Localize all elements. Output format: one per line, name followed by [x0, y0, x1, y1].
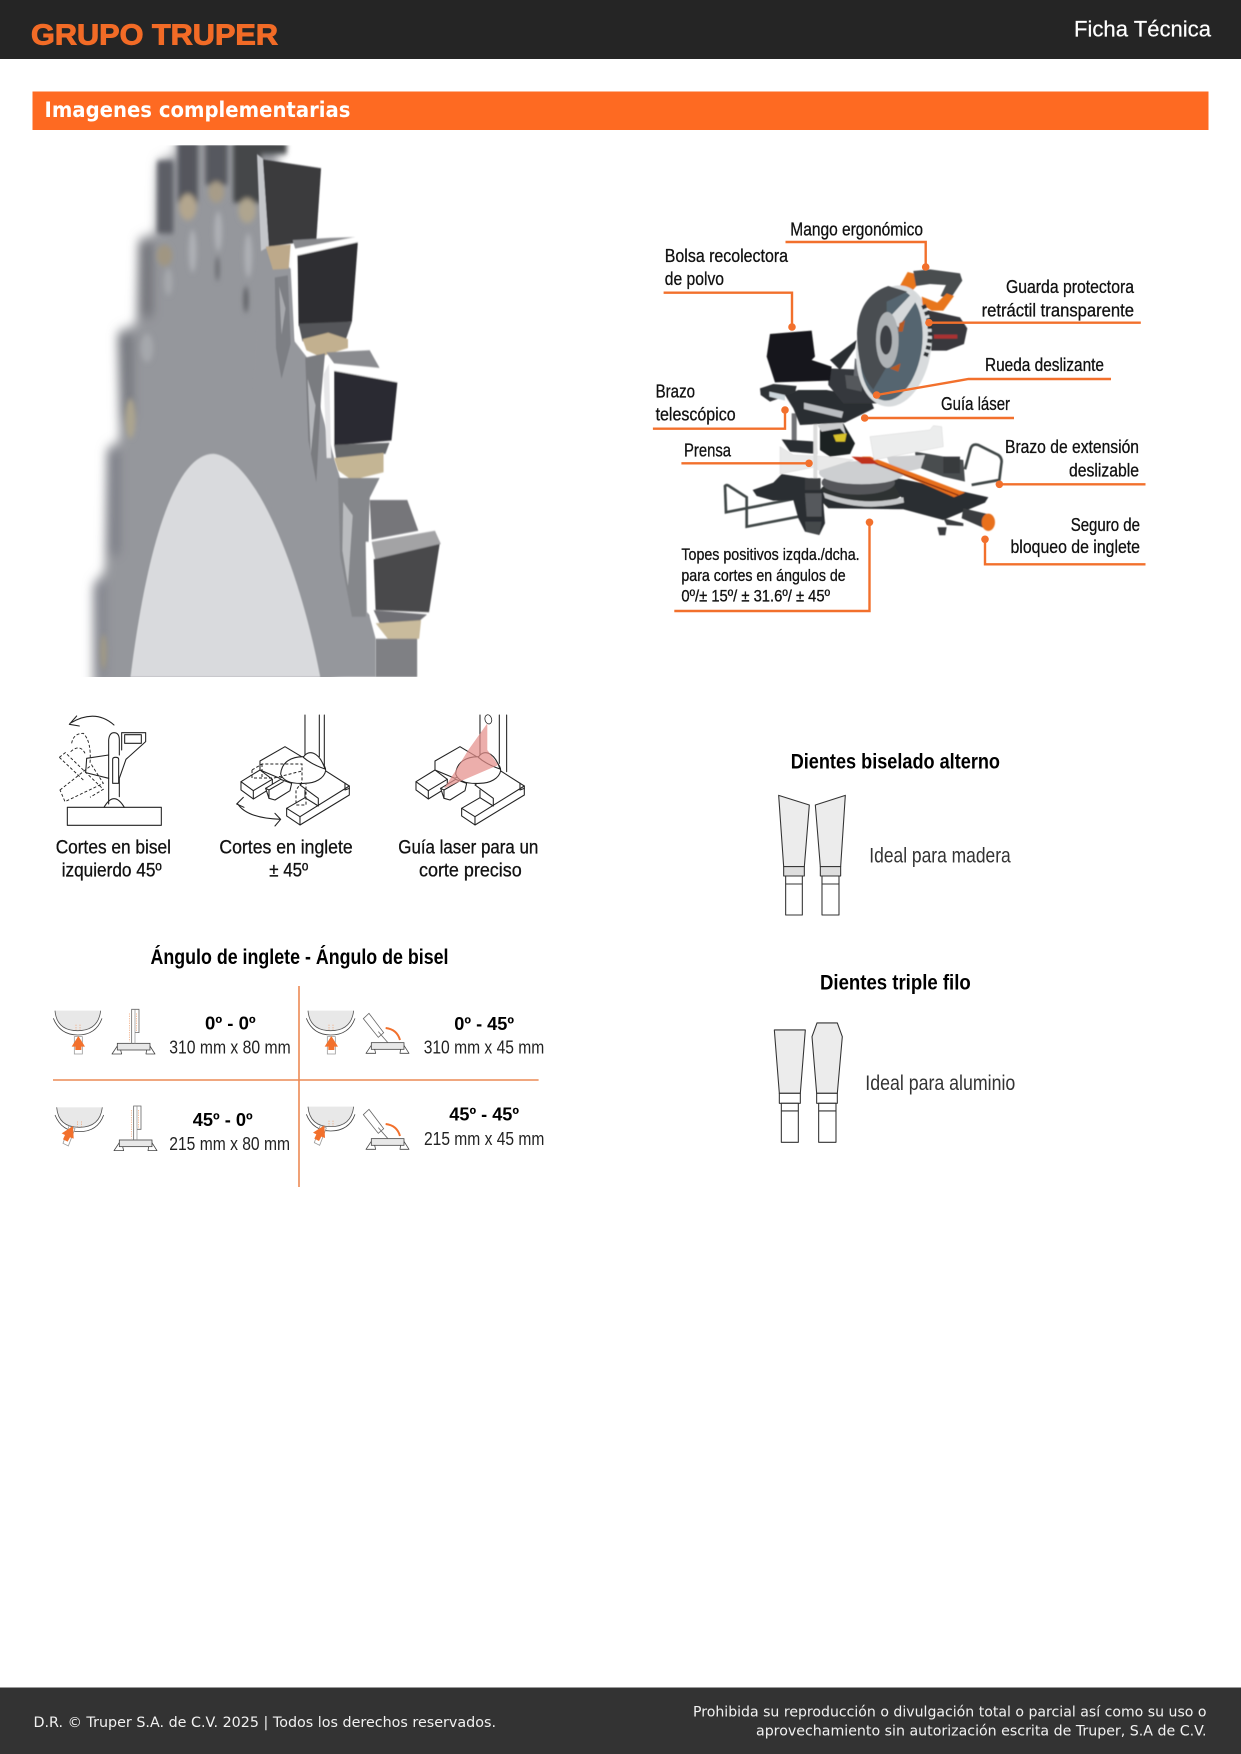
cell: 0-45	[306, 1011, 544, 1057]
cell: 0-0: 0º - 0º	[205, 1012, 256, 1033]
callout labels: Rueda deslizante	[985, 354, 1104, 375]
icon: alternate bevel teeth	[779, 795, 845, 915]
icon captions: Cortes en inglete	[219, 836, 353, 858]
cell: 45-0: 45º - 0º	[193, 1109, 253, 1130]
callout labels: Mango ergonómico	[790, 219, 923, 240]
callout labels	[656, 219, 1140, 606]
icon captions: Guía laser para un	[398, 836, 538, 858]
section heading bar	[32, 92, 1208, 130]
footer: legal notice: aprovechamiento sin autorización escrita de Truper, S.A de C.V.	[756, 1724, 1206, 1740]
callout labels: de polvo	[665, 268, 724, 289]
photo: saw blade close-up	[93, 132, 441, 705]
panel: alternate bevel teeth	[779, 750, 1011, 915]
callout labels: Guía láser	[941, 393, 1010, 414]
callout labels: Prensa	[684, 440, 732, 461]
icon: miter cut	[237, 715, 349, 826]
heading: alternate bevel: Dientes biselado alterno	[791, 750, 1000, 773]
callout labels: 0º/± 15º/ ± 31.6º/ ± 45º	[681, 588, 830, 606]
callout labels: Topes positivos izqda./dcha.	[681, 546, 860, 564]
icon: laser guide	[416, 714, 524, 825]
icon captions: izquierdo 45º	[62, 860, 162, 882]
panel: triple chip teeth	[774, 971, 1015, 1142]
cell: 45-45: 45º - 45º	[449, 1104, 519, 1125]
callout labels: Brazo	[656, 381, 695, 402]
cell: 45-45: 215 mm x 45 mm	[424, 1128, 544, 1149]
note: ideal for wood: Ideal para madera	[869, 843, 1011, 867]
cutting capacity table	[53, 986, 544, 1187]
callout labels: retráctil transparente	[982, 300, 1134, 321]
logo: Grupo Truper: GRUPO TRUPER	[31, 20, 278, 52]
icon captions: corte preciso	[419, 860, 522, 882]
cell: 0-45: 0º - 45º	[454, 1013, 514, 1034]
footer: copyright: D.R. © Truper S.A. de C.V. 2025 | Todos los derechos reservados.	[34, 1715, 496, 1731]
callout labels: bloqueo de inglete	[1010, 536, 1140, 557]
callout labels: telescópico	[656, 404, 736, 425]
footer: legal notice: Prohibida su reproducción o divulgación total o parcial así como su uso o	[693, 1705, 1206, 1721]
cell: 45-0	[55, 1106, 290, 1154]
callout labels: Brazo de extensión	[1005, 436, 1139, 457]
cell: 0-0	[53, 1009, 291, 1057]
callout labels: Seguro de	[1071, 514, 1140, 535]
callout labels: Guarda protectora	[1006, 276, 1135, 297]
icon: bevel cut	[59, 716, 161, 825]
blade centre disc	[130, 454, 320, 677]
heading: miter and bevel angles: Ángulo de inglete - Ángulo de bisel	[150, 946, 448, 969]
footer bar	[0, 1687, 1241, 1754]
blade body right edge in focus	[276, 266, 376, 677]
heading: triple chip: Dientes triple filo	[820, 971, 971, 994]
callout labels: Bolsa recolectora	[665, 245, 789, 266]
cell: 45-0: 215 mm x 80 mm	[169, 1133, 290, 1154]
blade teeth sharp in focus	[257, 154, 441, 677]
callout labels: para cortes en ángulos de	[681, 567, 846, 585]
icon captions	[56, 836, 538, 882]
callout labels: deslizable	[1069, 460, 1139, 481]
icon: triple chip teeth	[774, 1023, 842, 1142]
header title: Ficha Técnica	[1074, 16, 1211, 42]
cell: 45-45	[306, 1104, 544, 1149]
header bar	[0, 0, 1241, 59]
cell: 0-45: 310 mm x 45 mm	[424, 1036, 544, 1057]
footer: legal notice	[693, 1705, 1206, 1740]
cell: 0-0: 310 mm x 80 mm	[169, 1036, 291, 1057]
section heading text: Imagenes complementarias	[44, 98, 350, 122]
icon captions: Cortes en bisel	[56, 836, 171, 858]
product photo: sliding miter saw	[725, 269, 1002, 535]
icon captions: ± 45º	[269, 860, 308, 882]
note: ideal for aluminium: Ideal para aluminio	[865, 1071, 1015, 1095]
callout lines with dots	[653, 242, 1146, 611]
